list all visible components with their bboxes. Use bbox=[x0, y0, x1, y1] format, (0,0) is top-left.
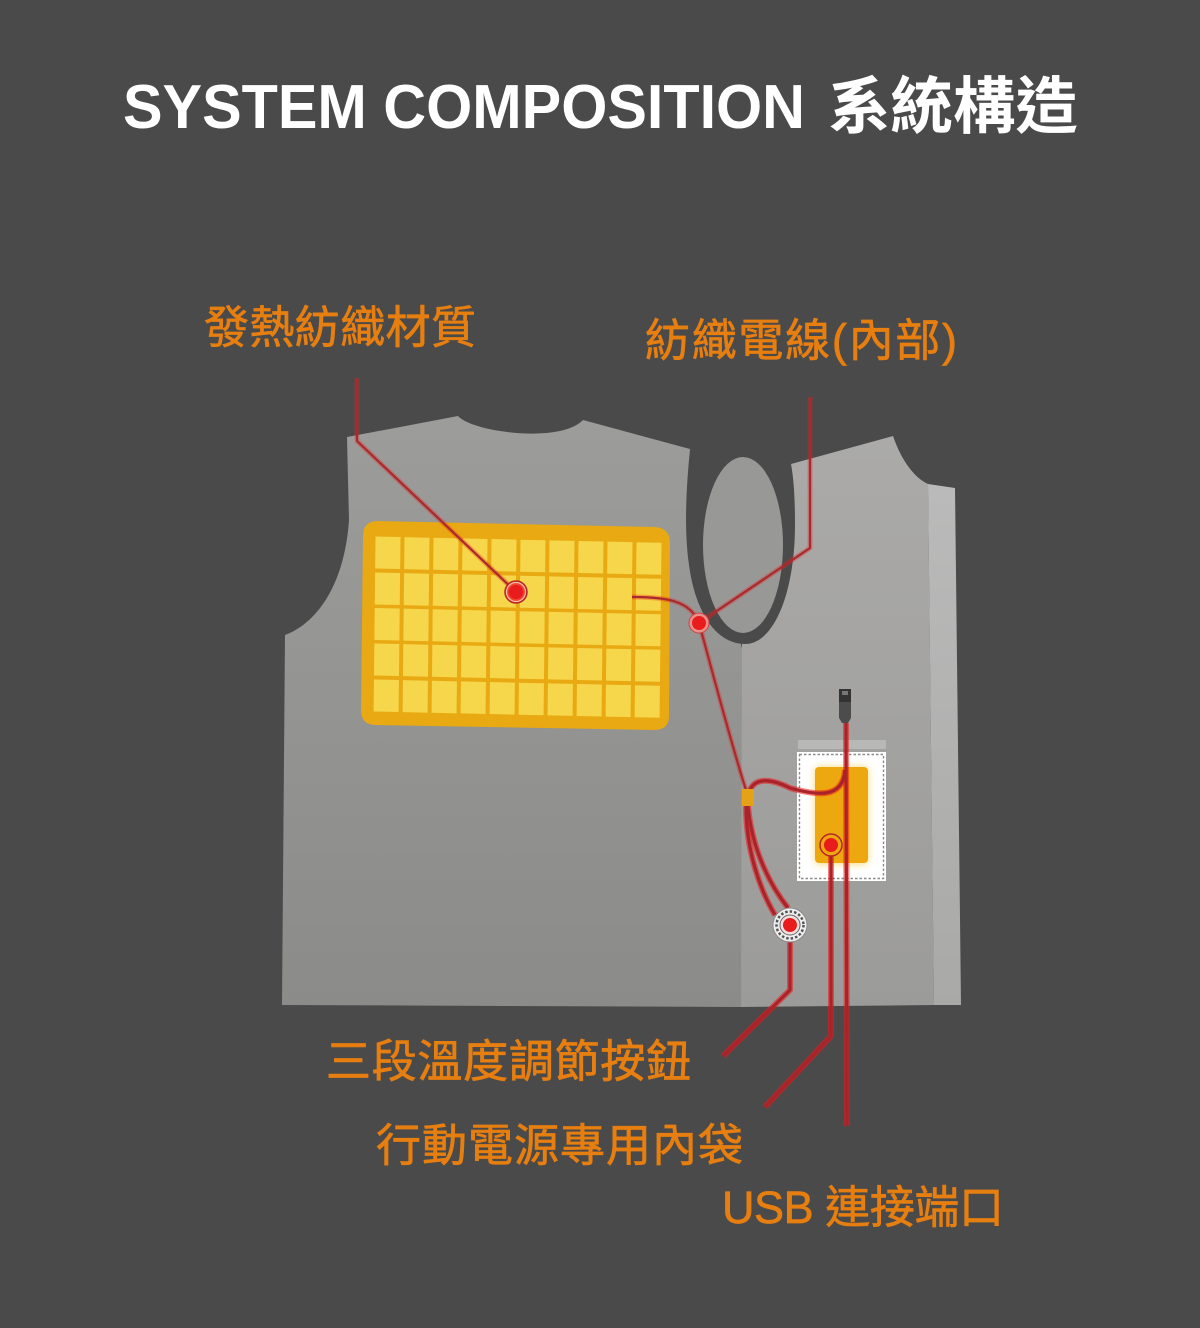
vest garment bbox=[282, 400, 961, 1007]
marker: heating textile bbox=[505, 581, 527, 603]
armhole inner lining bbox=[703, 457, 783, 633]
armhole opening bbox=[686, 400, 795, 644]
label: textile cable: 紡織電線(內部) bbox=[645, 315, 957, 366]
pocket body bbox=[797, 752, 886, 881]
power bank pocket bbox=[797, 740, 886, 881]
heating textile panel bbox=[361, 521, 670, 730]
wire to textile cable label bbox=[699, 397, 810, 623]
power bank bbox=[815, 767, 868, 863]
cable connector bbox=[742, 789, 754, 806]
top cover of opening above shoulder bbox=[690, 440, 791, 464]
button leader bbox=[723, 925, 790, 1056]
branch to power bank bbox=[750, 770, 845, 793]
label: power bank pocket: 行動電源專用內袋 bbox=[376, 1120, 743, 1171]
textile cable bbox=[632, 597, 746, 790]
power pocket leader bbox=[765, 845, 831, 1107]
marker: power bank bbox=[820, 834, 842, 856]
side strip bbox=[928, 484, 961, 1005]
title: 系統構造 bbox=[828, 73, 1078, 142]
marker: textile cable bbox=[689, 613, 709, 633]
wiring bbox=[357, 378, 847, 1126]
label: heating textile: 發熱紡織材質 bbox=[204, 302, 476, 353]
front panel bbox=[741, 436, 934, 1007]
USB cable bbox=[846, 723, 847, 1126]
heating grid cells bbox=[374, 536, 662, 718]
title: SYSTEM COMPOSITION bbox=[123, 73, 805, 142]
branches to button bbox=[746, 806, 775, 915]
power bank glow bbox=[815, 767, 868, 864]
icon: USB plug bbox=[839, 689, 851, 723]
label: temperature button: 三段溫度調節按鈕 bbox=[326, 1036, 691, 1087]
back panel bbox=[282, 416, 745, 1007]
marker: temperature button bbox=[773, 908, 807, 942]
wire to heating textile label bbox=[357, 378, 516, 592]
wire glow bbox=[357, 378, 516, 592]
label: USB port: USB 連接端口 bbox=[722, 1182, 1004, 1233]
pocket zipper bbox=[798, 740, 886, 749]
